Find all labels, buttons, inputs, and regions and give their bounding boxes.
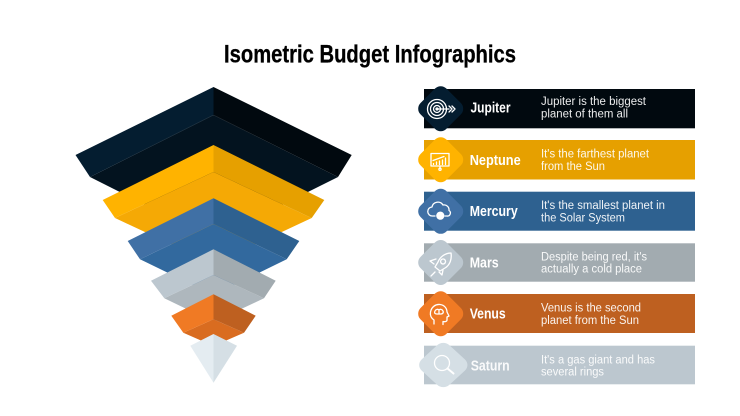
description: Mars: actually a cold place (541, 264, 642, 276)
diamond: Mars (415, 237, 467, 288)
icon: magnifying glass (434, 356, 454, 374)
diamond: Mercury (415, 185, 467, 237)
title: Isometric Budget Infographics (224, 40, 516, 68)
layer: Neptune yellow (103, 145, 324, 264)
row: Saturn (416, 340, 695, 390)
description: Mercury: the Solar System (541, 212, 625, 224)
icon: target with arrow (428, 100, 455, 118)
bar: Mercury (424, 192, 695, 231)
description: Jupiter: planet of them all (541, 108, 628, 120)
description: Venus: Venus is the second (541, 303, 641, 315)
diamond: Venus (415, 288, 467, 340)
icon: rocket (430, 253, 451, 276)
icon: cloud with gear (428, 202, 450, 219)
label: Mars: Mars (470, 256, 499, 272)
isometric inverted pyramid chart (76, 87, 352, 383)
bar: Mars (424, 243, 695, 282)
layer: Saturn pale tip (190, 334, 237, 383)
bar: Jupiter (424, 89, 695, 128)
description: Saturn: several rings (541, 366, 604, 378)
diamond: Neptune (415, 134, 467, 186)
bar: Saturn (424, 346, 695, 384)
layer: Mercury blue (128, 198, 299, 295)
icon: head with brain (430, 304, 449, 324)
label: Jupiter: Jupiter (470, 101, 511, 117)
label: Venus: Venus (470, 306, 506, 322)
bar: Neptune (424, 140, 695, 180)
description: Saturn: It's a gas giant and has (541, 354, 655, 366)
label: Neptune: Neptune (470, 153, 521, 169)
label: Saturn: Saturn (471, 359, 510, 375)
description: Venus: planet from the Sun (541, 315, 639, 327)
layer: Mars grey (151, 249, 276, 322)
layer: Venus orange (171, 294, 256, 346)
row: Neptune (415, 134, 695, 186)
description: Jupiter: Jupiter is the biggest (541, 96, 647, 108)
row: Mercury (415, 185, 695, 237)
row: Mars (415, 237, 695, 288)
description: Neptune: from the Sun (541, 161, 605, 173)
description: Neptune: It's the farthest planet (541, 149, 650, 161)
layer: Jupiter dark navy (76, 87, 352, 239)
description: Mercury: It's the smallest planet in (541, 200, 665, 212)
icon: presentation board (431, 154, 449, 170)
bar: Venus (424, 294, 695, 333)
row: Jupiter (415, 83, 695, 135)
diamond: Jupiter (415, 83, 467, 135)
diamond: Saturn (416, 340, 471, 390)
description: Mars: Despite being red, it's (541, 252, 647, 264)
label: Mercury: Mercury (470, 204, 518, 220)
row: Venus (415, 288, 695, 340)
